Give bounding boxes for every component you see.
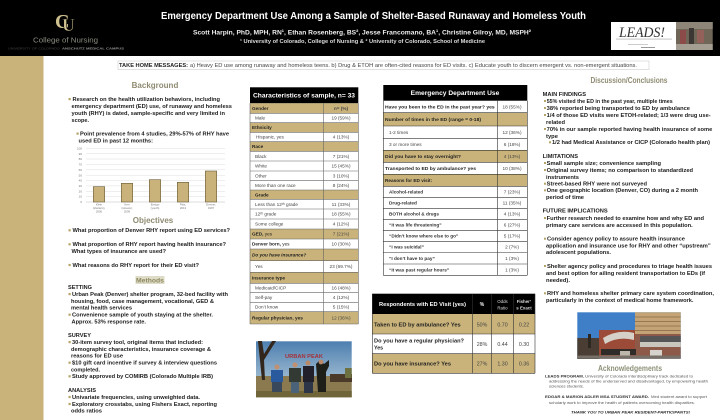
text: analysis bbox=[68, 388, 217, 415]
photo: Urban Peak group: URBAN PEAK bbox=[285, 354, 323, 360]
text: limitations bbox=[543, 154, 698, 201]
table: characteristics of sample: 18 (55%) bbox=[331, 212, 351, 217]
bar chart: ED use prevalence by study: 40 bbox=[79, 179, 82, 183]
table: characteristics of sample: Black bbox=[255, 154, 267, 159]
table: characteristics of sample: 5 (15%) bbox=[333, 305, 350, 310]
text: limitations: LIMITATIONS bbox=[543, 154, 578, 160]
text: main findings: 1/2 had Medical Assistance or CICP (Colorado health plan) bbox=[552, 140, 710, 146]
table: characteristics of sample: n= (%) bbox=[334, 106, 349, 111]
table: respondents with ED visit: 0.22 bbox=[519, 322, 529, 328]
table: respondents with ED visit bbox=[372, 294, 535, 373]
logo: CU and College of Nursing: UNIVERSITY OF COLORADO bbox=[8, 46, 61, 50]
text: setting: Convenience sample of youth staying at the shelter. bbox=[72, 313, 214, 319]
text: survey: SURVEY bbox=[68, 333, 91, 339]
table: emergency department use: Drug-related bbox=[389, 200, 417, 205]
table: characteristics of sample: 15 (45%) bbox=[331, 164, 351, 169]
table: respondents with ED visit: 27% bbox=[477, 362, 488, 368]
table: respondents with ED visit: % bbox=[480, 302, 485, 308]
text: setting: Approx. 53% response rate. bbox=[72, 319, 147, 325]
text: LEADS program: addressing the needs of the underserved and disadvantaged, by empowering health bbox=[549, 378, 708, 383]
text: limitations: period of time bbox=[546, 195, 584, 201]
table: emergency department use bbox=[383, 85, 527, 275]
table: emergency department use: 1 (3%) bbox=[505, 267, 519, 272]
heading: discussion/conclusions: Discussion/Conclusions bbox=[590, 76, 668, 85]
text: future implications: Consider agency policy to assure health insurance bbox=[547, 237, 685, 243]
text: main findings: 1/4 of those ED visits were ETOH-related; 1/3 were drug use- bbox=[547, 113, 711, 119]
table: emergency department use: 4 (13%) bbox=[504, 211, 521, 216]
table: emergency department use: 1 (3%) bbox=[505, 256, 519, 261]
table: emergency department use: 7 (23%) bbox=[504, 189, 521, 194]
text: survey: demographic characteristics, insurance coverage & bbox=[71, 347, 211, 353]
tan side strip bbox=[0, 56, 44, 420]
panel: objectives bbox=[68, 216, 230, 269]
table: respondents with ED visit: 28% bbox=[477, 342, 488, 348]
bar chart: ED use prevalence by study: Klein bbox=[96, 202, 103, 206]
photo: hospital building bbox=[577, 312, 681, 359]
table: characteristics of sample: Do you have insurance? bbox=[252, 252, 306, 258]
text: analysis: Exploratory crosstabs, using Fishers Exact, reporting bbox=[72, 402, 217, 408]
table: characteristics of sample: 3 (10%) bbox=[333, 173, 350, 178]
text: research: used ED in past 12 months: bbox=[78, 138, 153, 144]
text: setting: housing, food, case management, vocational, GED & bbox=[71, 299, 214, 305]
take home messages box: TAKE HOME MESSAGES: bbox=[119, 63, 188, 69]
table: respondents with ED visit: Fisher’ bbox=[517, 299, 531, 304]
table: respondents with ED visit: Odds bbox=[497, 299, 509, 304]
bar chart: ED use prevalence by study: 70 bbox=[79, 162, 82, 166]
text: LEADS program: sciences students. bbox=[549, 384, 584, 389]
panel: discussion and conclusions bbox=[543, 76, 715, 304]
text: setting bbox=[68, 285, 228, 325]
text: future implications: RHY and homeless shelter primary care system coordination, bbox=[547, 291, 715, 297]
table: characteristics of sample: Gender bbox=[252, 106, 269, 111]
text: setting: Urban Peak (Denver) shelter program, 32-bed facility with bbox=[72, 292, 228, 298]
table: emergency department use: 1-2 times bbox=[389, 130, 409, 135]
table: characteristics of sample: Some college bbox=[255, 222, 284, 227]
text: analysis: ANALYSIS bbox=[68, 388, 96, 394]
text: future implications: primary care services are accessed in this population. bbox=[546, 223, 693, 229]
text: research bbox=[68, 97, 232, 144]
table: emergency department use: “I was suicidal” bbox=[389, 244, 424, 250]
text: survey: completed. bbox=[71, 367, 100, 373]
text: survey: reasons for ED use bbox=[71, 354, 123, 360]
text: main findings: type bbox=[546, 134, 558, 140]
table: respondents with ED visit: 1.30 bbox=[497, 362, 508, 368]
table: characteristics of sample: 7 (21%) bbox=[333, 232, 350, 237]
table: respondents with ED visit: Respondents with ED Visit (yes) bbox=[379, 302, 466, 308]
bar chart: ED use prevalence by study: 60 bbox=[79, 168, 82, 172]
text: main findings: 38% reported being transported to ED by ambulance bbox=[547, 106, 690, 112]
table: characteristics of sample: Male bbox=[255, 116, 266, 121]
table: characteristics of sample: 4 (12%) bbox=[333, 222, 350, 227]
bar chart: ED use prevalence by study: 20 bbox=[79, 189, 82, 193]
table: emergency department use: Transported to ED by ambulance? yes bbox=[385, 166, 476, 171]
take home messages box: a) Heavy ED use among runaway and homeless teens. b) Drug & ETOH are often-cited reasons for ED visits. c) Educate youth to discern emergent vs. non-emergent situations. bbox=[190, 63, 637, 69]
text: objective questions: What types of insurance are used? bbox=[72, 249, 166, 255]
text: objective questions bbox=[68, 228, 230, 269]
bar chart: ED use prevalence by study: 80 bbox=[79, 157, 82, 161]
table: characteristics of sample: White bbox=[255, 164, 267, 169]
table: respondents with ED visit: 0.30 bbox=[519, 342, 529, 348]
text: setting: mental health services bbox=[71, 306, 132, 312]
table: respondents with ED visit: s Exact bbox=[516, 305, 532, 310]
title: Emergency Department Use Among a Sample of Shelter-Based Runaway and Homeless Youth bbox=[161, 10, 586, 22]
heading: methods: Methods bbox=[136, 278, 164, 284]
logo: CU and College of Nursing: U bbox=[62, 15, 75, 35]
table: respondents with ED visit: Do you have insurance? Yes bbox=[374, 362, 451, 368]
text: future implications: particularly in the context of medical home framework. bbox=[546, 298, 694, 304]
bar chart: ED use prevalence by study: 90 bbox=[79, 152, 82, 156]
bar chart: ED use prevalence by study: 10 bbox=[79, 195, 82, 199]
text: future implications bbox=[543, 209, 715, 304]
text: analysis: Univariate frequencies, using unweighted data. bbox=[72, 395, 201, 401]
bar chart: ED use prevalence by study: 2000 bbox=[96, 210, 103, 214]
text: main findings: MAIN FINDINGS bbox=[543, 92, 586, 98]
table: characteristics of sample: More than one race bbox=[255, 183, 296, 188]
text: thank you: THANK YOU TO URBAN PEAK RESIDENT-PARTICIPANTS! bbox=[571, 410, 691, 415]
table: emergency department use: 18 (55%) bbox=[502, 105, 522, 110]
text: limitations: Street-based RHY were not surveyed bbox=[547, 182, 647, 188]
table: characteristics of sample: Less than 12ᵗʰ grade bbox=[255, 202, 298, 207]
text: objective questions: What reasons do RHY report for their ED visit? bbox=[72, 263, 199, 269]
text: survey: Study approved by COMIRB (Colorado Multiple IRB) bbox=[72, 374, 213, 380]
bar chart: ED use prevalence by study: Kerr bbox=[124, 202, 130, 206]
table: characteristics of sample: Denver born, yes bbox=[252, 242, 290, 247]
text: future implications: application and insurance use for RHY and other “upstream” bbox=[546, 243, 711, 249]
text: future implications: FUTURE IMPLICATIONS bbox=[543, 209, 608, 215]
table: characteristics of sample: Insurance type bbox=[252, 276, 285, 280]
text: objective questions: What proportion of Denver RHY report using ED services? bbox=[72, 228, 230, 234]
table: characteristics of sample: Medicaid/CICP bbox=[255, 286, 286, 291]
table: characteristics of sample: Ethnicity bbox=[252, 125, 272, 130]
logo: CU and College of Nursing bbox=[8, 11, 124, 50]
text: Adler award bbox=[545, 394, 708, 405]
text: research: Research on the health utilization behaviors, including bbox=[72, 97, 220, 103]
text: survey bbox=[68, 333, 217, 380]
table: emergency department use: “I don’t have to pay” bbox=[389, 256, 435, 261]
table: emergency department use: Have you been to the ED in the past year? yes bbox=[385, 105, 495, 110]
text: limitations: instruments bbox=[546, 175, 579, 181]
logo: CU and College of Nursing: C bbox=[55, 11, 69, 33]
text: Adler award: Med student award to support bbox=[651, 394, 708, 399]
table: emergency department use: 3 or more times bbox=[389, 142, 422, 147]
LEADS logo panel bbox=[611, 22, 713, 50]
table: characteristics of sample: Other bbox=[255, 173, 267, 178]
text: main findings: 70% in our sample reported having health insurance of some bbox=[547, 127, 712, 133]
table: emergency department use: 4 (13%) bbox=[504, 154, 521, 159]
table: characteristics of sample: Yes bbox=[255, 264, 263, 269]
text: future implications: Further research needed to examine how and why ED and bbox=[547, 216, 704, 222]
table: respondents with ED visit: Do you have a regular physician? bbox=[374, 339, 464, 345]
table: characteristics of sample: 12 (36%) bbox=[331, 316, 351, 321]
table: characteristics of sample: GED, yes bbox=[252, 232, 273, 237]
table: characteristics of sample: 10 (30%) bbox=[331, 242, 351, 247]
text: research: youth (RHY) is dated, sample-specific and very limited in bbox=[72, 111, 225, 117]
table: emergency department use: Reasons for ED visit: bbox=[385, 178, 433, 183]
bar chart: ED use prevalence by study: (streets), bbox=[121, 206, 133, 210]
text: future implications: adolescent populations. bbox=[546, 250, 612, 256]
table: respondents with ED visit: Ratio bbox=[497, 305, 508, 310]
table: emergency department use: Alcohol-related bbox=[389, 189, 423, 194]
text: future implications: Shelter agency policy and procedures to triage health issues bbox=[547, 264, 712, 270]
bar chart: ED use prevalence by study: 2013 bbox=[180, 206, 187, 210]
bar chart: ED use prevalence by study: Ensign bbox=[151, 202, 160, 206]
text: limitations: Small sample size; convenience sampling bbox=[547, 161, 661, 167]
heading: objectives: Objectives bbox=[133, 216, 174, 225]
bar chart: ED use prevalence by study: 0 bbox=[80, 200, 82, 204]
text: main findings bbox=[543, 92, 712, 146]
LEADS logo panel: LEADS! bbox=[618, 25, 665, 41]
table: characteristics of sample: 12ᵗʰ grade bbox=[255, 212, 277, 217]
table: respondents with ED visit: 50% bbox=[477, 322, 488, 328]
table: emergency department use: Emergency Department Use bbox=[411, 90, 500, 97]
text: limitations: Original survey items; no comparison to standardized bbox=[547, 168, 693, 174]
authors: Scott Harpin, PhD, MPH, RN¹, Ethan Rosenberg, BS², Jesse Francomano, BA¹, Christine Gilroy, MD, MSPH² bbox=[193, 30, 532, 37]
bar chart: ED use prevalence by study: (shelters), bbox=[93, 206, 105, 210]
table: emergency department use: BOTH alcohol & drugs bbox=[389, 211, 439, 216]
text: objective questions: What proportion of RHY report having health insurance? bbox=[72, 242, 226, 248]
bar chart: ED use prevalence by study: 50 bbox=[79, 173, 82, 177]
text: main findings: related bbox=[546, 120, 565, 126]
table: emergency department use: Number of times in the ED (range = 0-18) bbox=[385, 117, 481, 122]
table: emergency department use: “Didn’t know where else to go” bbox=[389, 233, 458, 238]
bar chart: ED use prevalence by study: Pitts, bbox=[180, 202, 186, 206]
bar chart: ED use prevalence by study: 1997 bbox=[208, 206, 215, 210]
table: characteristics of sample: 23 (69.7%) bbox=[330, 264, 353, 269]
table: respondents with ED visit: 0.70 bbox=[497, 322, 508, 328]
bar chart: ED use prevalence by study: 30 bbox=[79, 184, 82, 188]
table: emergency department use: 6 (18%) bbox=[504, 142, 521, 147]
bar chart: ED use prevalence by study: (youth) bbox=[151, 206, 159, 210]
text: Adler award: scholarly work to improve the health of patients overcoming health disparities. bbox=[549, 400, 695, 405]
table: emergency department use: 11 (35%) bbox=[503, 200, 522, 205]
text: main findings: 55% visited the ED in the past year, multiple times bbox=[547, 99, 673, 105]
text: limitations: One geographic location (Denver, CO) during a 2 month bbox=[547, 188, 698, 194]
affiliations: ¹ University of Colorado, College of Nursing & ² University of Colorado, School of Medicine bbox=[240, 39, 485, 45]
table: characteristics of sample: Race bbox=[252, 144, 264, 149]
table: characteristics of sample: 16 (48%) bbox=[331, 286, 351, 291]
table: respondents with ED visit: 0.44 bbox=[497, 342, 508, 348]
text: survey: $10 gift card incentive if survey & interview questions bbox=[72, 361, 217, 367]
table: respondents with ED visit: Taken to ED by ambulance? Yes bbox=[374, 322, 461, 328]
table: characteristics of sample bbox=[250, 87, 358, 324]
table: respondents with ED visit: 0.36 bbox=[519, 362, 529, 368]
table: emergency department use: 10 (38%) bbox=[502, 166, 522, 171]
text: survey: 30-item survey tool, original items that included: bbox=[72, 340, 203, 346]
text: Adler award: EDGAR & MARION ADLER MSA STUDENT AWARD. bbox=[545, 394, 649, 399]
text: LEADS program bbox=[545, 373, 708, 389]
text: research: scope. bbox=[72, 118, 90, 124]
panel: methods bbox=[68, 276, 228, 415]
table: emergency department use: 6 (27%) bbox=[504, 222, 521, 227]
table: emergency department use: 5 (17%) bbox=[504, 233, 521, 238]
bar chart: ED use prevalence by study: Denver, bbox=[206, 202, 216, 206]
table: characteristics of sample: 19 (59%) bbox=[331, 116, 351, 121]
text: analysis: odds ratios bbox=[71, 409, 102, 415]
table: emergency department use: 12 (36%) bbox=[502, 130, 522, 135]
table: characteristics of sample: 11 (33%) bbox=[332, 202, 351, 207]
text: LEADS program: University of Colorado interdisciplinary track dedicated to bbox=[585, 373, 693, 378]
text: research: Point prevalence from 4 studies, 29%-57% of RHY have bbox=[80, 132, 229, 138]
table: emergency department use: Did you have to stay overnight? bbox=[385, 154, 461, 159]
text: future implications: needed). bbox=[546, 278, 571, 284]
text: LEADS program: LEADS PROGRAM. bbox=[545, 373, 584, 378]
table: characteristics of sample: Grade bbox=[255, 192, 269, 197]
panel: acknowledgements bbox=[545, 364, 708, 415]
heading: background: Background bbox=[132, 81, 178, 90]
bar chart: ED use prevalence by study: 100 bbox=[77, 146, 82, 150]
text: research: emergency department (ED) use, of runaway and homeless bbox=[72, 104, 232, 110]
table: characteristics of sample: Regular physician, yes bbox=[252, 316, 303, 321]
table: characteristics of sample: Characteristics of sample, n= 33 bbox=[253, 93, 356, 100]
logo: CU and College of Nursing: ANSCHUTZ MEDICAL CAMPUS bbox=[62, 46, 124, 50]
bar chart: ED use prevalence by study: 2009 bbox=[124, 210, 131, 214]
take home messages box bbox=[118, 61, 649, 69]
photo: Urban Peak group bbox=[256, 341, 352, 397]
table: emergency department use: “It was life threatening” bbox=[389, 222, 442, 227]
table: emergency department use: 2 (7%) bbox=[505, 244, 519, 250]
table: characteristics of sample: Don’t know bbox=[255, 305, 279, 310]
table: characteristics of sample: Hispanic, yes bbox=[256, 135, 285, 140]
table: emergency department use: “It was past regular hours” bbox=[389, 267, 449, 272]
text: future implications: and best option for ailing resident transportation to EDs (if bbox=[546, 271, 705, 277]
table: characteristics of sample: 4 (12%) bbox=[333, 295, 350, 300]
table: characteristics of sample: 8 (24%) bbox=[333, 183, 350, 188]
logo: CU and College of Nursing: College of Nursing bbox=[33, 36, 98, 44]
text: setting: SETTING bbox=[68, 285, 92, 291]
bar chart: ED use prevalence by study bbox=[77, 146, 225, 214]
table: characteristics of sample: 7 (21%) bbox=[333, 154, 350, 159]
header banner bbox=[0, 0, 720, 56]
panel: background bbox=[68, 81, 232, 214]
table: characteristics of sample: Self-pay bbox=[255, 295, 273, 300]
table: characteristics of sample: 4 (13%) bbox=[333, 135, 350, 140]
heading: acknowledgements: Acknowledgements bbox=[598, 364, 662, 373]
table: respondents with ED visit: Yes bbox=[374, 345, 383, 351]
